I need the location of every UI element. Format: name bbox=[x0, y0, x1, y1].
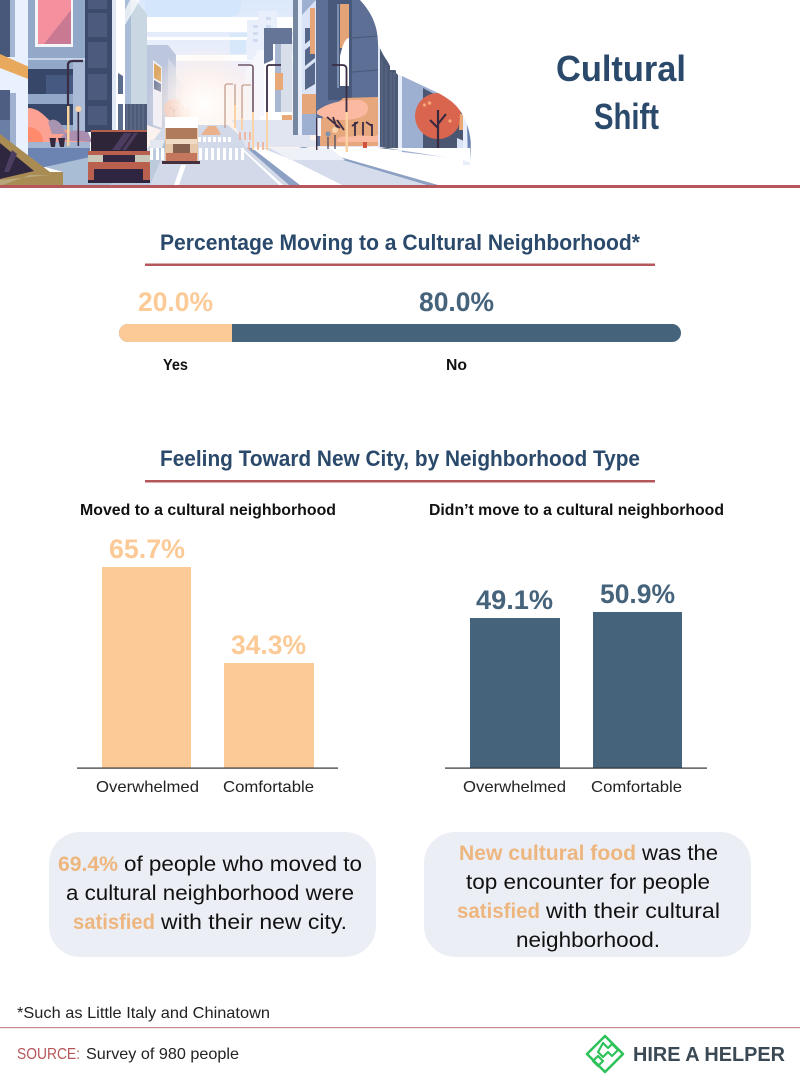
pink sign building bbox=[28, 0, 85, 148]
callout: new cultural food: New cultural food bbox=[459, 841, 636, 865]
truck bbox=[162, 117, 200, 164]
source line bbox=[17, 1046, 239, 1063]
value: comfortable: 34.3% bbox=[231, 630, 306, 660]
callout: new cultural food: satisfied bbox=[457, 899, 540, 923]
far street lamps bbox=[225, 84, 251, 130]
sun glow bbox=[147, 47, 263, 163]
left far building bbox=[0, 0, 28, 185]
callout: new cultural food: neighborhood. bbox=[516, 928, 660, 952]
callout: satisfied with new city: 69.4% bbox=[58, 852, 118, 876]
ground road bbox=[0, 150, 470, 185]
white column and grey glass bbox=[112, 0, 125, 135]
striped dark building bbox=[379, 45, 398, 150]
section heading: percentage moving: Percentage Moving to a Cultural Neighborhood* bbox=[160, 230, 640, 255]
title bbox=[556, 48, 686, 137]
value: no: 80.0% bbox=[419, 287, 494, 317]
road markings bbox=[174, 165, 186, 185]
bar: overwhelmed bbox=[102, 567, 191, 768]
icon: green diamond bbox=[587, 1036, 623, 1072]
street bollards bbox=[240, 132, 263, 150]
header divider bbox=[0, 185, 800, 188]
crosswalk stripes bbox=[150, 137, 244, 160]
category: overwhelmed: Overwhelmed bbox=[463, 779, 566, 796]
callout: satisfied with new city bbox=[49, 832, 376, 957]
callout: satisfied with new city: of people who moved to bbox=[124, 852, 362, 876]
callout: new cultural food: top encounter for people bbox=[466, 870, 710, 894]
bar: comfortable bbox=[593, 612, 682, 768]
near lamp bbox=[332, 65, 346, 150]
blue building with red tree bbox=[402, 76, 470, 160]
far buildings left of road bbox=[147, 45, 176, 135]
chart title: Didn’t move to a cultural neighborhood bbox=[429, 502, 724, 519]
callout: satisfied with new city: a cultural neighborhood were bbox=[66, 881, 354, 905]
source line: Survey of 980 people bbox=[86, 1046, 239, 1063]
callout: satisfied with new city: satisfied bbox=[73, 910, 155, 934]
street lamps and bins bbox=[68, 61, 83, 146]
far traffic bbox=[201, 126, 221, 135]
logo: Hire A Helper bbox=[587, 1036, 786, 1072]
dark glass tower bbox=[85, 0, 112, 132]
callout: satisfied with new city: with their new city. bbox=[160, 910, 347, 934]
bar chart: did not move to a cultural neighborhood bbox=[429, 502, 724, 796]
footnote: *Such as Little Italy and Chinatown bbox=[17, 1005, 270, 1022]
sky bbox=[130, 0, 320, 150]
bar segment: yes bbox=[119, 324, 232, 342]
bar: overwhelmed bbox=[470, 618, 560, 768]
title: Cultural bbox=[556, 48, 686, 89]
sidewalk and grey pavement bbox=[252, 148, 345, 185]
value: comfortable: 50.9% bbox=[600, 579, 675, 609]
rooftop in foreground bbox=[0, 134, 63, 186]
far buildings right of road bbox=[244, 50, 276, 133]
wordmark: HIRE A HELPER bbox=[633, 1044, 786, 1066]
category: comfortable: Comfortable bbox=[591, 779, 682, 796]
dark right building bbox=[316, 0, 378, 146]
label: no: No bbox=[446, 357, 467, 374]
value: overwhelmed: 49.1% bbox=[476, 585, 553, 615]
category: overwhelmed: Overwhelmed bbox=[96, 779, 199, 796]
category: comfortable: Comfortable bbox=[223, 779, 314, 796]
stacked bar: moving to a cultural neighborhood bbox=[119, 287, 681, 374]
bar segment: no bbox=[119, 324, 681, 342]
white blob edge over illustration bbox=[360, 0, 800, 185]
value: overwhelmed: 65.7% bbox=[109, 534, 185, 564]
value: yes: 20.0% bbox=[138, 287, 213, 317]
distant white towers bbox=[247, 11, 277, 60]
callout: new cultural food: was the bbox=[641, 841, 718, 865]
source line: SOURCE: bbox=[17, 1046, 80, 1063]
pink trees bbox=[28, 108, 92, 142]
peach trees bbox=[320, 97, 378, 146]
header city illustration bbox=[0, 0, 800, 186]
bar chart: moved to a cultural neighborhood bbox=[77, 502, 338, 796]
callout: new cultural food bbox=[424, 832, 751, 957]
callout: new cultural food: with their cultural bbox=[545, 899, 720, 923]
car bbox=[88, 130, 150, 183]
section heading: feeling toward new city: Feeling Toward New City, by Neighborhood Type bbox=[160, 446, 640, 471]
main right building bbox=[293, 0, 329, 135]
chart title: Moved to a cultural neighborhood bbox=[80, 502, 336, 519]
title: Shift bbox=[594, 96, 659, 137]
label: yes: Yes bbox=[163, 357, 188, 374]
bar: comfortable bbox=[224, 663, 314, 768]
